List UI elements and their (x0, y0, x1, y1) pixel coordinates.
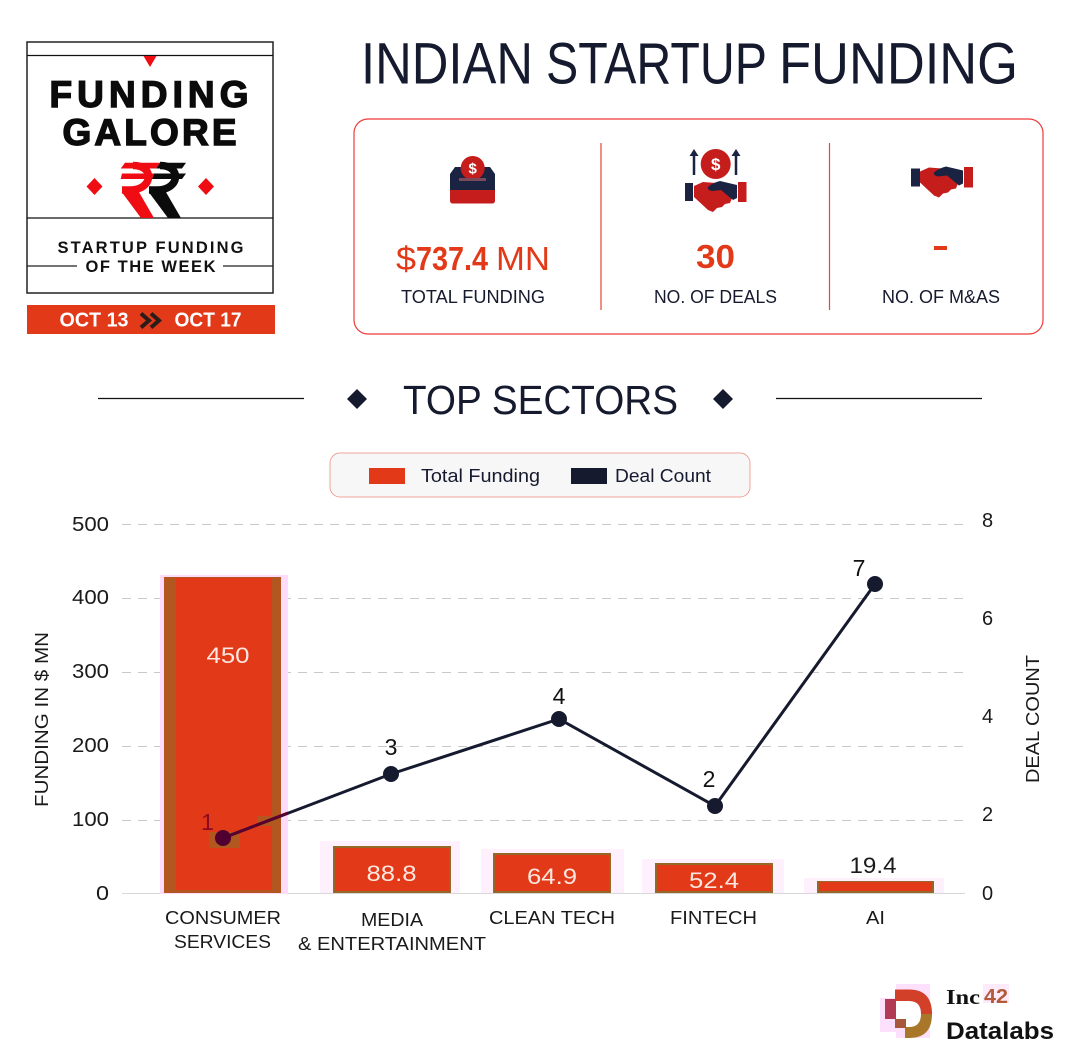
title (361, 32, 1018, 96)
badge: funding galore: FUNDING (50, 74, 248, 115)
line: deal count (201, 555, 883, 846)
title: STARTUP (546, 32, 767, 96)
icon: D mark (880, 984, 932, 1038)
heading: top sectors (98, 377, 982, 423)
left axis ticks: 200 (72, 735, 109, 757)
stat: total funding (396, 240, 550, 307)
date banner: OCT 13 (60, 310, 128, 332)
line: deal count: 1 (201, 809, 214, 835)
title: INDIAN (361, 32, 533, 96)
left axis title: FUNDING IN $ MN (32, 632, 52, 807)
icon: coin with arrows and handshake (685, 149, 746, 212)
legend: Deal Count (615, 466, 711, 486)
bar: clean tech (481, 849, 624, 893)
category labels: SERVICES (174, 931, 271, 952)
icon: coin into box: $ (469, 160, 478, 178)
badge: funding galore: GALORE (62, 112, 236, 153)
left axis ticks: 300 (72, 661, 109, 683)
category labels: MEDIA (361, 909, 424, 930)
badge: funding galore: STARTUP FUNDING (58, 239, 244, 257)
category labels (165, 907, 885, 954)
bar: consumer services (160, 575, 288, 894)
legend: Total Funding (421, 466, 540, 486)
badge: funding galore: OF THE WEEK (86, 258, 216, 276)
stat: number of M&As (882, 246, 1000, 307)
left axis ticks: 0 (96, 883, 109, 905)
bar: AI: 19.4 (850, 853, 896, 878)
line: deal count: 2 (703, 766, 715, 792)
icon: coin with arrows and handshake: $ (711, 155, 721, 174)
line: deal count: 7 (853, 555, 865, 581)
line: deal count: 4 (553, 683, 566, 709)
badge: funding galore (27, 42, 273, 293)
stat: total funding: MN (496, 240, 550, 277)
stat: total funding: 737.4 (416, 240, 489, 277)
bar: consumer services: 450 (206, 643, 250, 668)
right axis title: DEAL COUNT (1023, 655, 1043, 783)
bar: media & entertainment: 88.8 (366, 861, 416, 886)
category labels: AI (866, 907, 885, 928)
stat: total funding: TOTAL FUNDING (401, 287, 545, 307)
bar: fintech: 52.4 (689, 868, 739, 893)
right axis ticks: 2 (982, 804, 993, 826)
logo: Inc42 Datalabs: 42 (984, 986, 1008, 1008)
date banner: OCT 17 (174, 310, 242, 332)
panel: key stats (354, 119, 1043, 334)
legend (330, 453, 750, 497)
left axis ticks: 400 (72, 587, 109, 609)
right axis ticks: 0 (982, 883, 993, 905)
stat: number of deals: NO. OF DEALS (654, 287, 777, 307)
logo: Inc42 Datalabs: Datalabs (946, 1018, 1054, 1045)
icon: handshake (911, 166, 973, 198)
category labels: CLEAN TECH (489, 907, 615, 928)
category labels: FINTECH (670, 907, 757, 928)
line: deal count: 3 (385, 734, 397, 760)
left axis ticks (72, 514, 109, 905)
icon: rupee symbols (121, 163, 186, 218)
logo: Inc42 Datalabs (880, 984, 1054, 1045)
heading: top sectors: TOP SECTORS (403, 377, 678, 423)
right axis ticks: 4 (982, 706, 993, 728)
right axis ticks: 6 (982, 608, 993, 630)
left axis ticks: 500 (72, 514, 109, 536)
stat: number of M&As: NO. OF M&AS (882, 287, 1000, 307)
bar: fintech (642, 859, 784, 893)
category labels: CONSUMER (165, 907, 281, 928)
date banner (27, 305, 275, 334)
right axis ticks (982, 510, 993, 905)
icon: coin into box (450, 156, 495, 204)
stat: number of deals (654, 238, 777, 307)
category labels: & ENTERTAINMENT (298, 933, 486, 954)
chart: funding bars and deal count line (32, 510, 1043, 954)
bar: media & entertainment (320, 841, 460, 893)
logo: Inc42 Datalabs: Inc (946, 985, 980, 1009)
left axis ticks: 100 (72, 809, 109, 831)
stat: total funding: $ (396, 240, 416, 277)
stat: number of deals: 30 (696, 238, 735, 275)
bar: clean tech: 64.9 (527, 864, 577, 889)
bar: AI (804, 853, 944, 893)
right axis ticks: 8 (982, 510, 993, 532)
gridlines and axis (122, 524, 965, 894)
title: FUNDING (779, 32, 1018, 96)
